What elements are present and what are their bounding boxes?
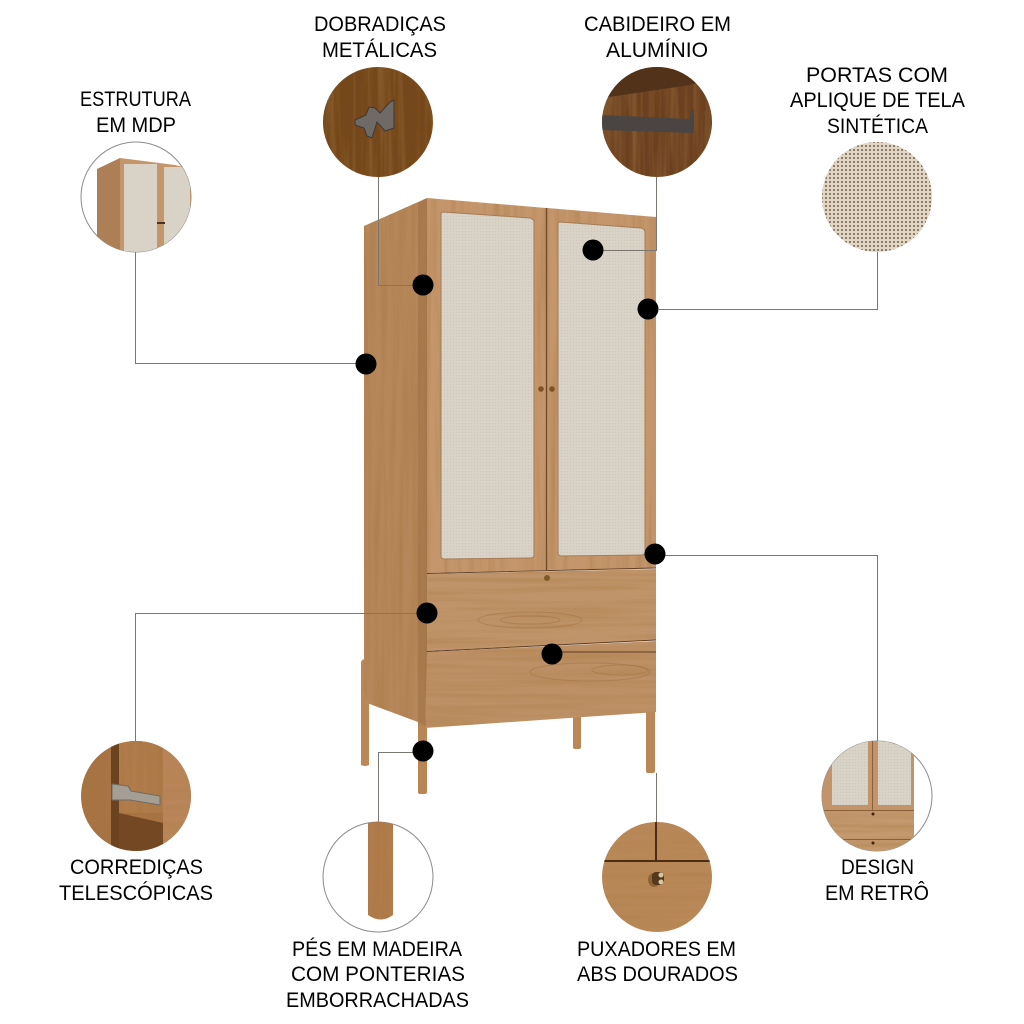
heading <box>790 64 965 138</box>
rear left leg <box>361 659 369 766</box>
feature: dobradiças metálicas <box>314 13 446 177</box>
lower drawer <box>425 641 656 728</box>
front right leg <box>646 710 655 773</box>
circle image <box>822 741 932 851</box>
heading: PORTAS COM <box>806 64 948 87</box>
feature: puxadores em ABS dourados <box>577 822 738 986</box>
heading: PÉS EM MADEIRA <box>292 938 462 961</box>
circle image <box>822 142 932 252</box>
feature: cabideiro em alumínio <box>584 13 731 177</box>
wardrobe illustration <box>361 198 656 794</box>
circle image <box>323 67 433 177</box>
heading <box>577 938 738 986</box>
upper drawer <box>427 569 656 651</box>
circle image <box>602 67 712 177</box>
corner post <box>418 678 426 727</box>
heading: CABIDEIRO EM <box>584 13 731 36</box>
heading: ALUMÍNIO <box>606 39 708 62</box>
side panel corner shading <box>418 198 428 722</box>
heading <box>314 13 446 62</box>
cane panel: left <box>441 212 534 559</box>
cane panel: right <box>558 222 645 556</box>
door frame: left <box>427 198 546 573</box>
upper drawer knob <box>544 575 550 581</box>
icon: hinge <box>355 100 394 138</box>
heading: ESTRUTURA <box>80 88 191 111</box>
heading: EMBORRACHADAS <box>286 989 469 1012</box>
feature: pés em madeira <box>286 820 469 1012</box>
circle image <box>602 822 712 932</box>
door knobs <box>538 386 555 392</box>
circle image <box>80 142 192 252</box>
callout dots <box>356 240 666 762</box>
upper drawer grain <box>478 612 582 628</box>
drawer separator lines <box>427 568 656 652</box>
heading: TELESCÓPICAS <box>59 882 213 905</box>
front left leg <box>418 690 427 794</box>
feature: estrutura em MDP <box>80 92 192 252</box>
feature: portas com aplique de tela sintética <box>790 64 965 252</box>
heading <box>584 13 731 62</box>
heading: EM MDP <box>96 114 176 137</box>
heading: PUXADORES EM <box>577 938 736 961</box>
door seam <box>546 208 548 570</box>
heading <box>825 856 929 905</box>
heading: CORREDIÇAS <box>70 856 203 879</box>
heading <box>80 88 191 137</box>
heading: DOBRADIÇAS <box>314 13 446 36</box>
icon: slide rail <box>112 784 160 805</box>
feature: corrediças telescópicas <box>59 741 213 905</box>
heading: SINTÉTICA <box>827 115 928 138</box>
heading: METÁLICAS <box>322 39 437 62</box>
icon: gold knob <box>648 872 664 887</box>
lower drawer grain <box>530 663 650 681</box>
feature: design em retrô <box>822 741 932 905</box>
side panel <box>364 198 428 722</box>
rear centre leg <box>573 715 581 749</box>
door frame: right <box>547 208 656 570</box>
heading <box>286 938 469 1012</box>
heading: DESIGN <box>841 856 914 879</box>
heading: APLIQUE DE TELA <box>790 89 965 112</box>
heading: ABS DOURADOS <box>577 963 738 986</box>
circle image <box>81 741 191 851</box>
heading: EM RETRÔ <box>825 882 929 905</box>
heading: COM PONTERIAS <box>291 963 465 986</box>
circle image <box>323 820 433 932</box>
icon: rail <box>602 109 694 133</box>
leader lines <box>136 177 878 822</box>
heading <box>59 856 213 905</box>
